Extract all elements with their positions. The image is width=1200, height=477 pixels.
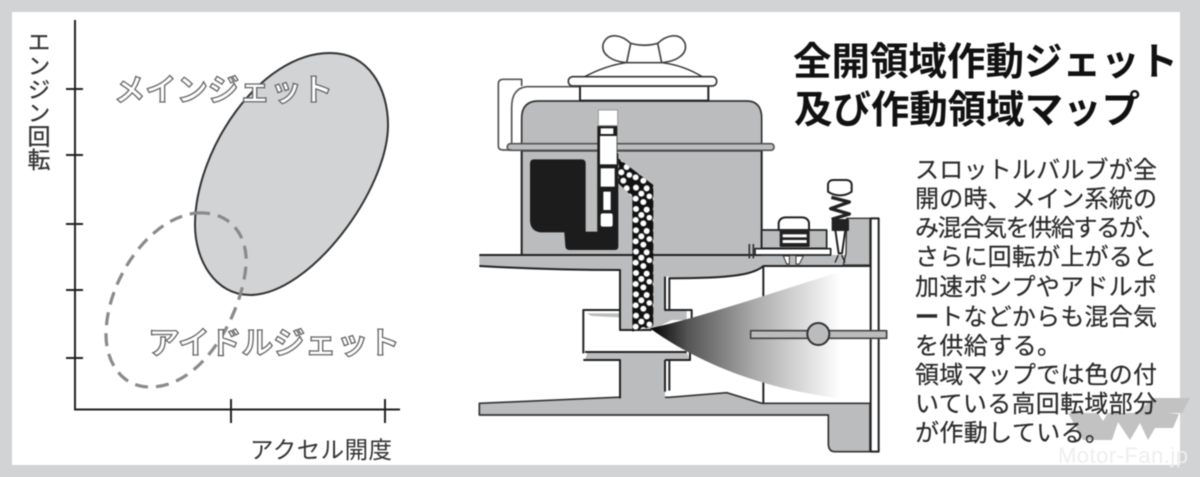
air screw and spring xyxy=(828,180,852,263)
carburetor cross-section diagram xyxy=(479,36,887,452)
dome cap xyxy=(583,63,703,77)
panel: operating region map xyxy=(24,20,400,463)
label: main jet: メインジェット xyxy=(114,73,333,108)
bowl lid xyxy=(522,101,762,144)
lower flange xyxy=(585,353,690,360)
side block xyxy=(762,230,827,248)
vertical plate xyxy=(871,218,879,452)
description text: 領域マップでは色の付 xyxy=(915,362,1157,389)
base top line xyxy=(479,252,757,258)
fuel xyxy=(530,153,618,250)
title line 1: 全開領域作動ジェット xyxy=(793,41,1178,84)
main jet tube xyxy=(597,110,618,230)
bowl flange xyxy=(507,144,774,150)
upper venturi column xyxy=(587,269,687,329)
description text: スロットルバルブが全 xyxy=(915,157,1157,184)
title line 2: 及び作動領域マップ xyxy=(794,89,1140,132)
port openings xyxy=(783,256,803,264)
wing nut xyxy=(603,36,686,63)
description text: ートなどからも混合気 xyxy=(915,304,1157,331)
y axis label: エンジン回転 xyxy=(24,30,50,171)
air channel xyxy=(755,249,831,255)
description text: 開の時、メイン系統の xyxy=(915,186,1157,213)
fuel spray cone xyxy=(650,272,841,398)
upper base strip xyxy=(479,255,870,278)
right block xyxy=(843,218,870,265)
cap flange xyxy=(568,77,717,86)
description text xyxy=(915,157,1165,447)
description text: 加速ポンプやアドルポ xyxy=(915,274,1157,301)
lower venturi column xyxy=(620,357,665,400)
lower base casting xyxy=(479,393,870,452)
description text: さらに回転が上がると xyxy=(915,244,1157,271)
chart axes and ticks xyxy=(66,20,400,423)
description text: が作動している。 xyxy=(915,420,1109,447)
small ports xyxy=(749,244,753,258)
description text: み混合気を供給するが、 xyxy=(915,215,1165,242)
main jet region ellipse xyxy=(195,53,388,295)
overflow pipe xyxy=(498,79,580,150)
small jet screw xyxy=(779,217,809,246)
neck xyxy=(580,86,708,101)
description text: を供給する。 xyxy=(915,333,1061,360)
lower venturi lines xyxy=(583,348,763,403)
title xyxy=(793,41,1178,132)
watermark logo mark xyxy=(1068,398,1190,440)
description text: いている高回転域部分 xyxy=(915,391,1157,418)
throttle pivot xyxy=(807,323,829,345)
upper venturi lines xyxy=(479,266,870,353)
x axis label: アクセル開度 xyxy=(250,437,392,463)
float bowl xyxy=(522,151,762,255)
label: idle jet: アイドルジェット xyxy=(148,326,400,361)
throttle shaft xyxy=(751,331,887,338)
watermark text: Motor-Fan.jp xyxy=(1058,443,1188,468)
emulsion passage with fuel-air bubbles xyxy=(618,158,653,332)
idle jet region dashed outline xyxy=(106,213,246,387)
